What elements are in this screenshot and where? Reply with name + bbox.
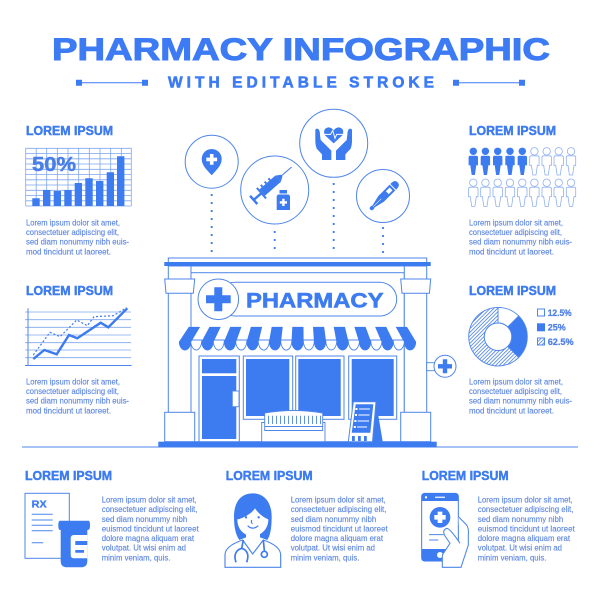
icon: thermometer [356, 170, 410, 222]
panel: bar chart block [26, 124, 131, 256]
text block: volutpat. Ut wisi enim ad [102, 543, 186, 553]
text block: consectetuer adipiscing elit, [102, 504, 197, 514]
text block: minim veniam, quis. [102, 552, 170, 562]
panel: donut chart block [469, 284, 574, 415]
heading: LOREM IPSUM [26, 124, 113, 138]
text block: Lorem ipsum dolor sit amet, [478, 494, 573, 504]
legend: 12.5% [548, 308, 572, 319]
icon: hands holding heart [300, 109, 368, 177]
icon: phone in hand [422, 493, 468, 567]
panel: prescription block [25, 469, 199, 567]
text block: mod tincidunt ut laoreet. [469, 405, 554, 415]
text block [26, 376, 129, 415]
icon: prescription and bottle [25, 493, 90, 567]
subtitle [76, 74, 525, 91]
icon: doctor [225, 493, 281, 567]
text block: consectetuer adipiscing elit, [478, 504, 573, 514]
text block: consectetuer adipiscing elit, [469, 227, 562, 237]
facade [165, 258, 431, 442]
text block: Lorem ipsum dolor sit amet, [102, 494, 197, 504]
text block: consectetuer adipiscing elit, [26, 386, 119, 396]
text block: minim veniam, quis. [291, 552, 359, 562]
panel: mobile app block [422, 469, 575, 567]
hanging cross sign [427, 355, 456, 377]
legend: 25% [548, 322, 566, 333]
text block: volutpat. Ut wisi enim ad [478, 543, 562, 553]
text block: volutpat. Ut wisi enim ad [291, 543, 375, 553]
bench [262, 410, 325, 442]
title: PHARMACY INFOGRAPHIC [52, 31, 550, 67]
heading: LOREM IPSUM [226, 469, 313, 483]
pharmacy sign: PHARMACY [246, 290, 384, 312]
dotted connectors [212, 184, 383, 253]
panel: pharmacist block [225, 469, 388, 567]
text block: euismod tincidunt ut laoreet [102, 523, 199, 533]
text block: sed diam nonummy nibh euis- [26, 237, 129, 247]
text block: mod tincidunt ut laoreet. [26, 246, 111, 256]
text block: dolore magna aliquam erat [478, 533, 571, 543]
text block: consectetuer adipiscing elit, [469, 386, 562, 396]
pharmacy building [158, 258, 456, 447]
text block [478, 494, 575, 562]
door [199, 356, 239, 442]
text block: euismod tincidunt ut laoreet [478, 523, 575, 533]
text block: mod tincidunt ut laoreet. [469, 246, 554, 256]
legend [537, 308, 574, 348]
50% label: 50% [32, 154, 76, 176]
text block [469, 376, 572, 415]
legend: 62.5% [548, 337, 574, 348]
panel: line chart block [25, 284, 132, 415]
text block: Lorem ipsum dolor sit amet, [469, 376, 563, 386]
pictogram chart [469, 148, 576, 206]
text block: consectetuer adipiscing elit, [26, 227, 119, 237]
text block: sed diam nonummy nibh [478, 514, 563, 524]
text block: minim veniam, quis. [478, 552, 546, 562]
text block: euismod tincidunt ut laoreet [291, 523, 388, 533]
text block: dolore magna aliquam erat [291, 533, 384, 543]
text block: consectetuer adipiscing elit, [291, 504, 386, 514]
text block: sed diam nonummy nibh [102, 514, 187, 524]
pharmacy sign [198, 279, 397, 320]
text block [102, 494, 199, 562]
heading: LOREM IPSUM [469, 124, 556, 138]
text block: sed diam nonummy nibh [291, 514, 376, 524]
line chart [25, 308, 132, 366]
heading: LOREM IPSUM [25, 469, 112, 483]
donut chart [469, 307, 527, 366]
icon: syringe and bottle [241, 156, 309, 224]
text block [26, 217, 129, 256]
text block [469, 217, 572, 256]
text block: Lorem ipsum dolor sit amet, [291, 494, 386, 504]
text block [291, 494, 388, 562]
text block: Lorem ipsum dolor sit amet, [26, 376, 120, 386]
text block: Lorem ipsum dolor sit amet, [469, 217, 563, 227]
icon: prescription and bottle: RX [32, 499, 47, 511]
text block: mod tincidunt ut laoreet. [26, 405, 111, 415]
heading: LOREM IPSUM [26, 284, 113, 298]
heading: LOREM IPSUM [469, 284, 556, 298]
subtitle: WITH EDITABLE STROKE [168, 74, 434, 91]
sandwich board [348, 402, 383, 442]
text block: sed diam nonummy nibh euis- [26, 396, 129, 406]
text block: Lorem ipsum dolor sit amet, [26, 217, 120, 227]
text block: sed diam nonummy nibh euis- [469, 396, 572, 406]
windows [243, 356, 397, 419]
ground line [22, 446, 578, 448]
heading: LOREM IPSUM [422, 469, 509, 483]
text block: sed diam nonummy nibh euis- [469, 237, 572, 247]
panel: people chart block [469, 124, 576, 256]
text block: dolore magna aliquam erat [102, 533, 195, 543]
awning [179, 327, 416, 350]
icon: location pin [185, 135, 238, 188]
